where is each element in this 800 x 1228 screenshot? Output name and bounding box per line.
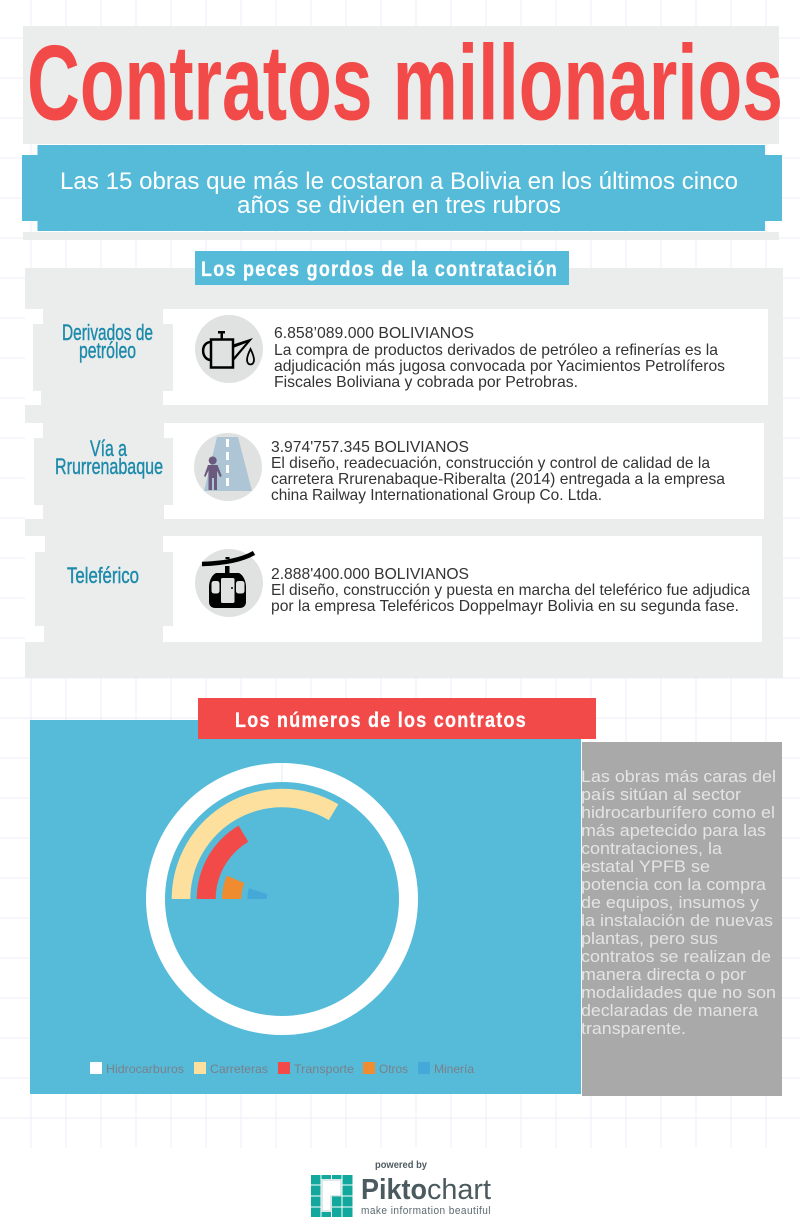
icon: oil can (195, 315, 263, 383)
text: teleferico: 2.888'400.000 BOLIVIANOS (271, 566, 469, 583)
icon: piktochart tiles (311, 1175, 352, 1217)
commentary text: potencia con la compra (581, 876, 767, 894)
text: teleferico: por la empresa Teleféricos Doppelmayr Bolivia en su segunda fase. (271, 598, 739, 615)
heading: peces gordos: Los peces gordos de la contratación (201, 258, 558, 281)
commentary text: contratos se realizan de (581, 948, 771, 966)
chart: radial bars (156, 763, 408, 1026)
legend: Otros (379, 1062, 408, 1076)
commentary text: declaradas de manera (581, 1002, 759, 1020)
label: teleferico: Teleférico (67, 563, 139, 588)
text: via: carretera Rrurenabaque-Riberalta (2014) entregada a la empresa (271, 471, 725, 488)
footer: piktochart logo: make information beautiful (361, 1205, 491, 1217)
subtitle text (60, 168, 738, 219)
legend: Minería (434, 1062, 474, 1076)
row: via a rurrenabaque (25, 423, 764, 519)
text: via: china Railway Internationational Group Co. Ltda. (271, 487, 602, 504)
text: derivados (274, 325, 725, 391)
commentary text: de equipos, insumos y (581, 894, 760, 912)
commentary text: transparente. (581, 1020, 686, 1038)
subtitle ribbon (22, 145, 782, 231)
label: derivados: Derivados de (62, 320, 153, 345)
subtitle text: años se dividen en tres rubros (237, 192, 561, 219)
commentary text (581, 768, 776, 1038)
row: teleferico (25, 536, 762, 642)
legend: Transporte (294, 1062, 354, 1076)
commentary text: Las obras más caras del (581, 768, 776, 786)
text: derivados: La compra de productos derivados de petróleo a refinerías es la (274, 342, 718, 359)
panel: peces gordos (25, 268, 783, 678)
title panel (23, 22, 783, 240)
heading: numeros: Los números de los contratos (235, 709, 527, 732)
text: via: 3.974'757.345 BOLIVIANOS (271, 439, 469, 456)
text: via: El diseño, readecuación, construcción y control de calidad de la (271, 455, 710, 472)
text: derivados: Fiscales Boliviana y cobrada por Petrobras. (274, 374, 578, 391)
row: derivados de petroleo (25, 309, 768, 406)
footer: piktochart logo: powered by (375, 1160, 427, 1171)
panel: commentary (581, 742, 782, 1096)
subtitle text: Las 15 obras que más le costaron a Bolivia en los últimos cinco (60, 168, 738, 195)
commentary text: país sitúan al sector (581, 786, 742, 804)
label: derivados (62, 320, 153, 363)
heading: peces gordos (195, 251, 569, 285)
commentary text: contrataciones, la (581, 840, 723, 858)
commentary text: hidrocarburífero como el (581, 804, 775, 822)
icon: cable car (195, 549, 263, 617)
label: via (55, 436, 163, 479)
commentary text: estatal YPFB se (581, 858, 710, 876)
label: via: Vía a (90, 436, 128, 461)
legend: Hidrocarburos (106, 1062, 184, 1076)
text: via (271, 439, 725, 504)
commentary text: la instalación de nuevas (581, 912, 773, 930)
commentary text: modalidades que no son (581, 984, 776, 1002)
commentary text: plantas, pero sus (581, 930, 718, 948)
text: teleferico: El diseño, construcción y puesta en marcha del teleférico fue adjudica (271, 582, 750, 599)
legend (90, 1062, 474, 1076)
commentary text: manera directa o por (581, 966, 747, 984)
footer: piktochart logo: Pikto (361, 1174, 427, 1206)
label: derivados: petróleo (79, 338, 136, 363)
label: via: Rrurrenabaque (55, 454, 163, 479)
legend: Carreteras (210, 1062, 268, 1076)
footer: piktochart logo: chart (427, 1174, 491, 1206)
text: teleferico (271, 566, 750, 615)
footer: piktochart logo (311, 1160, 491, 1217)
text: derivados: adjudicación más jugosa convocada por Yacimientos Petrolíferos (274, 358, 725, 375)
heading: numeros (198, 698, 596, 739)
text: derivados: 6.858’089.000 BOLIVIANOS (274, 325, 474, 342)
panel: chart (30, 720, 581, 1094)
icon: road (194, 433, 262, 501)
commentary text: más apetecido para las (581, 822, 766, 840)
